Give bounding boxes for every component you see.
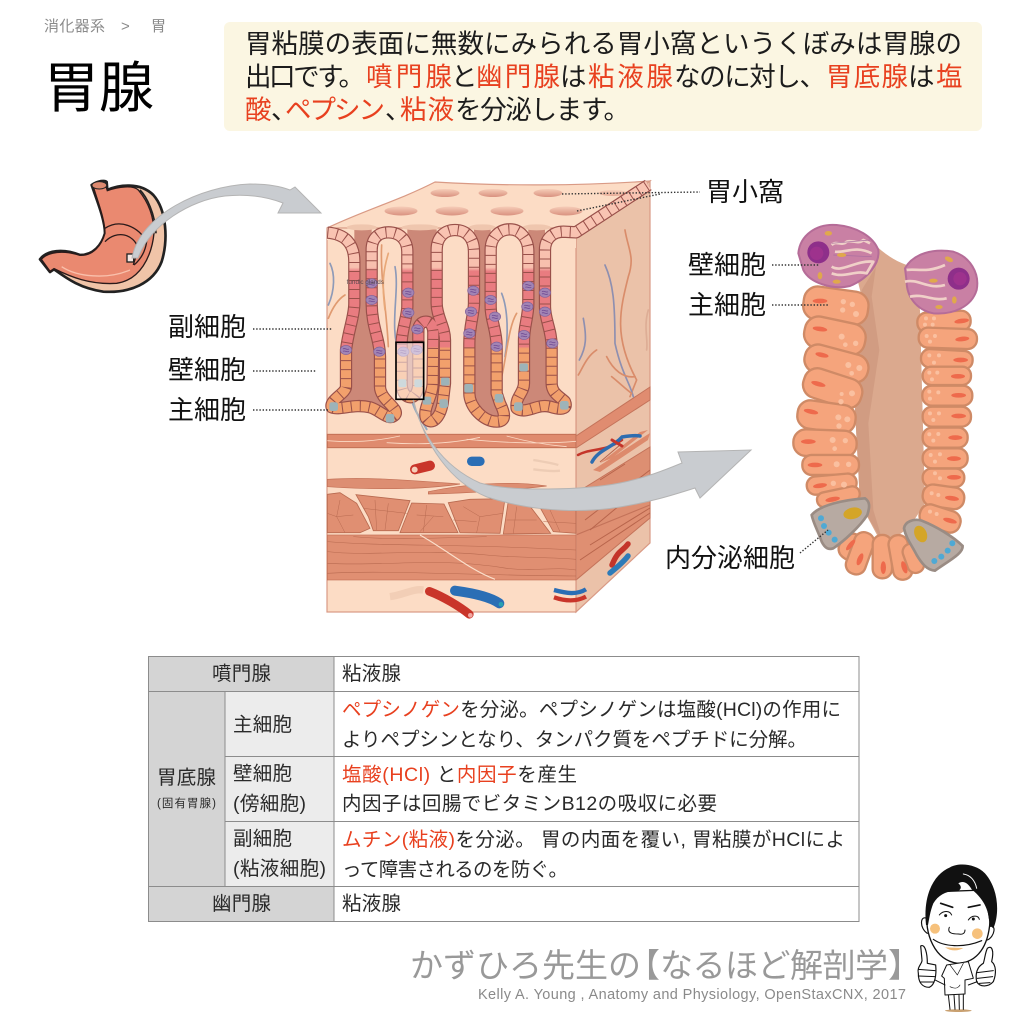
row: mucous cell: ムチン(粘液)を分泌。 胃の内面を覆い, 胃粘膜がHClによ xyxy=(342,829,845,851)
table of gland types xyxy=(148,656,859,922)
muscularis mucosae xyxy=(327,434,576,448)
top surface with gastric pits xyxy=(327,181,650,238)
row: chief cell: よりペプシンとなり、タンパク質をペプチドに分解。 xyxy=(342,729,807,751)
cheeks xyxy=(930,924,940,934)
row: cardiac glands: 噴門腺 xyxy=(212,663,271,685)
label: chief cell (right): 主細胞 xyxy=(688,290,766,320)
row: chief cell xyxy=(233,699,841,751)
label: parietal cell (left): 壁細胞 xyxy=(168,355,246,385)
hair xyxy=(925,865,997,928)
label: chief cell (left): 主細胞 xyxy=(168,395,246,425)
row: mucous cell: 副細胞 xyxy=(233,828,292,850)
brows and eyes xyxy=(941,903,980,907)
side vessels xyxy=(578,436,640,573)
left hand xyxy=(918,946,936,987)
fundic glands tiny label: fundic glands xyxy=(347,279,384,286)
enlarged gland detail xyxy=(793,225,977,581)
parietal cell left xyxy=(798,225,878,287)
row: chief cell: ペプシノゲンを分泌。ペプシノゲンは塩酸(HCl)の作用に xyxy=(342,699,841,721)
footer brand: なるほど解剖学 xyxy=(660,947,888,984)
summary callout: 粘液 xyxy=(400,95,454,125)
breadcrumb xyxy=(44,18,166,35)
chief cells xyxy=(793,285,977,581)
front face layers xyxy=(327,228,576,612)
row: fundic glands header: 胃底腺 xyxy=(157,767,216,789)
row: parietal cell: 壁細胞 xyxy=(233,763,292,785)
row: pyloric glands: 粘液腺 xyxy=(342,893,401,915)
fundic glands xyxy=(327,185,648,429)
row: parietal cell xyxy=(233,763,717,815)
label: mucous neck cell: 副細胞 xyxy=(168,312,246,342)
body xyxy=(942,962,973,995)
breadcrumb: 消化器系 xyxy=(44,18,105,35)
summary callout: ペプシン xyxy=(285,95,385,125)
row: cardiac glands xyxy=(212,663,401,685)
footer brand: かずひろ先生の xyxy=(410,947,641,984)
summary callout: 塩 xyxy=(936,62,962,92)
nose and mouth xyxy=(949,927,965,934)
row: pyloric glands xyxy=(212,893,401,915)
summary callout: 出口です。 xyxy=(245,62,365,92)
row: fundic glands header: (固有胃腺) xyxy=(157,796,216,810)
arrow: stomach to tissue block xyxy=(132,184,321,258)
circular muscle blocks xyxy=(327,493,576,534)
title: 胃腺 xyxy=(44,57,154,119)
face xyxy=(927,890,990,963)
footer brand: 【 xyxy=(627,947,660,984)
muscularis layers xyxy=(327,434,586,618)
summary callout: なのに対し、 xyxy=(674,62,826,92)
arrow: gland to enlarged detail xyxy=(413,400,751,511)
side face xyxy=(562,181,650,612)
summary callout: 噴門腺 xyxy=(366,62,452,92)
summary callout: は xyxy=(908,62,934,92)
summary callout: 、 xyxy=(271,95,298,125)
longitudinal muscle xyxy=(327,535,576,580)
breadcrumb: 胃 xyxy=(151,18,166,35)
summary callout: は xyxy=(560,62,586,92)
label: chief cell (right) xyxy=(688,290,828,320)
thin muscle fibres xyxy=(327,478,547,494)
source credit: Kelly A. Young , Anatomy and Physiology, OpenStaxCNX, 2017 xyxy=(478,987,906,1003)
gland vessels xyxy=(328,245,517,429)
right hand xyxy=(976,947,995,986)
label: endocrine cell xyxy=(665,530,828,573)
label: parietal cell (right): 壁細胞 xyxy=(688,250,766,280)
summary callout: と xyxy=(451,62,478,92)
summary callout xyxy=(224,22,982,131)
breadcrumb: > xyxy=(121,18,130,35)
enteroendocrine cell right xyxy=(904,520,963,571)
row: pyloric glands: 幽門腺 xyxy=(212,893,271,915)
row: cardiac glands: 粘液腺 xyxy=(342,663,401,685)
mascot: doctor giving thumbs up xyxy=(918,865,997,1012)
epithelial wall xyxy=(327,185,648,422)
row: parietal cell: (傍細胞) xyxy=(233,793,306,815)
footer brand xyxy=(410,947,921,984)
footer brand: 】 xyxy=(888,947,921,984)
row: parietal cell: 塩酸(HCl) と内因子を産生 xyxy=(342,764,577,786)
enteroendocrine cell left xyxy=(812,498,869,549)
row: chief cell: 主細胞 xyxy=(233,714,292,736)
summary callout: 胃底腺 xyxy=(826,62,908,92)
icon: stomach locator xyxy=(40,181,165,292)
row: parietal cell: 内因子は回腸でビタミンB12の吸収に必要 xyxy=(342,793,717,815)
gland lumen xyxy=(332,229,565,425)
label: endocrine cell: 内分泌細胞 xyxy=(665,543,795,573)
summary callout: 、 xyxy=(385,95,412,125)
summary callout: 酸 xyxy=(245,95,272,125)
summary callout: を分泌します。 xyxy=(455,95,630,125)
row: mucous cell: って障害されるのを防ぐ。 xyxy=(342,859,568,881)
enlargement box xyxy=(396,342,424,399)
label: gastric pit xyxy=(562,177,784,211)
parietal cell right xyxy=(905,251,977,314)
parietal cells xyxy=(340,279,558,356)
tissue block xyxy=(327,181,650,618)
summary callout: 胃粘膜の表面に無数にみられる胃小窩というくぼみは胃腺の xyxy=(245,29,962,59)
submucosa vessels xyxy=(390,460,586,618)
summary callout: 幽門腺 xyxy=(476,62,560,92)
label: gastric pit: 胃小窩 xyxy=(706,177,784,207)
ears xyxy=(921,918,994,940)
enteroendocrine cells xyxy=(329,363,569,423)
detail lumen xyxy=(850,240,925,547)
row: mucous cell xyxy=(233,828,845,881)
row: fundic glands header xyxy=(157,767,216,810)
summary callout: 粘液腺 xyxy=(588,62,673,92)
label: parietal cell (right) xyxy=(688,250,820,280)
row: mucous cell: (粘液細胞) xyxy=(233,858,326,880)
